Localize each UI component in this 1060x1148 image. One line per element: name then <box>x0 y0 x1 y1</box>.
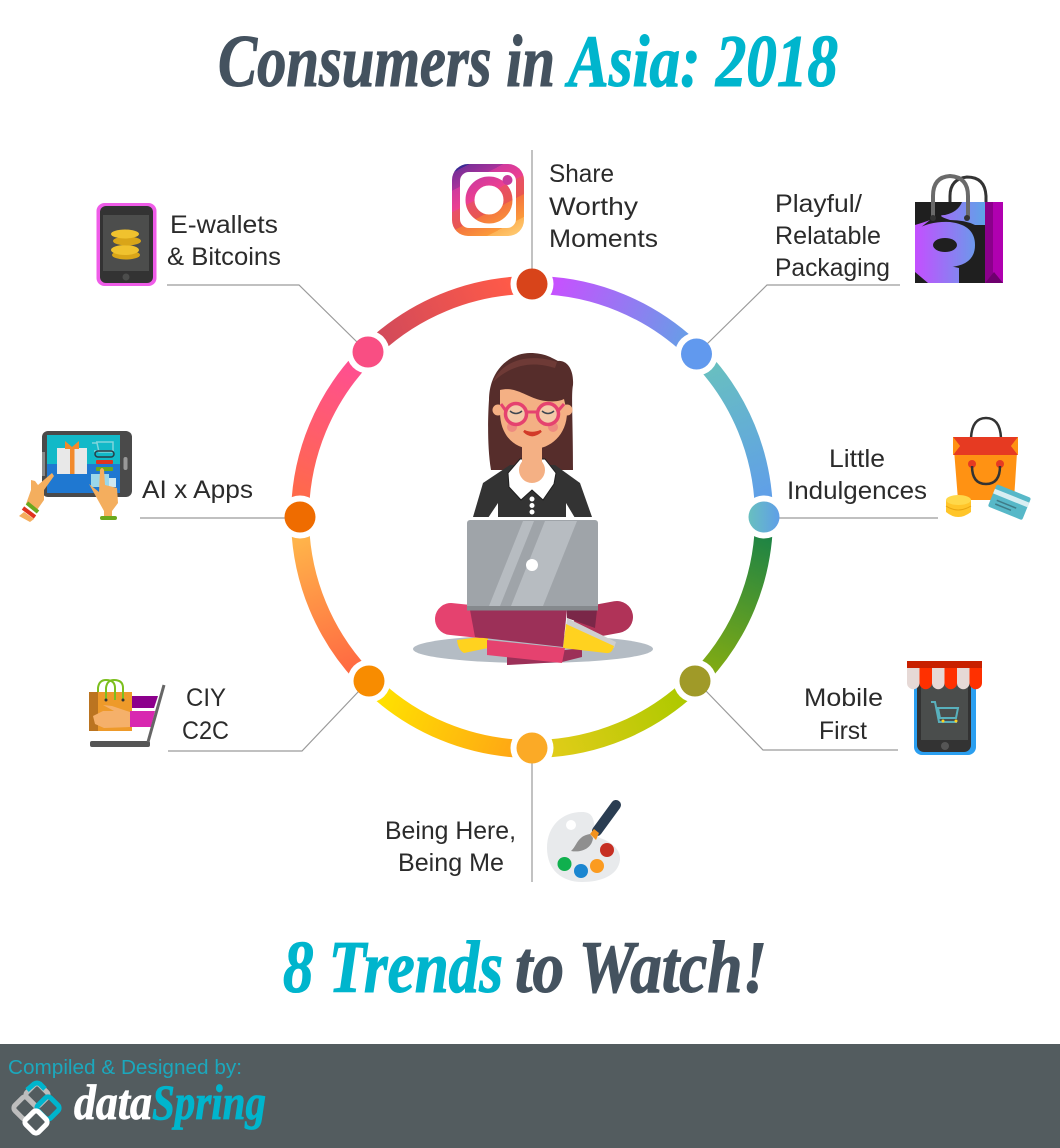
logo wordmark: data <box>74 1074 152 1130</box>
icon: shopping bag with letter e <box>915 176 1003 283</box>
label: Share Worthy Moments: Share <box>549 160 614 188</box>
title: Asia: 2018 <box>565 21 838 103</box>
icon: hands holding tablet <box>19 431 132 522</box>
ring nodes <box>284 268 780 764</box>
label: Playful / Relatable Packaging: Playful/ <box>775 190 862 218</box>
trend: Share Worthy Moments <box>452 160 658 253</box>
trend: E-wallets & Bitcoins <box>96 203 281 286</box>
trend: Being Here, Being Me <box>385 805 620 882</box>
title <box>218 21 838 103</box>
icon: dataSpring logo mark <box>12 1082 61 1135</box>
label: E-wallets & Bitcoins <box>167 211 281 271</box>
label: CIY C2C: C2C <box>182 717 229 745</box>
trend: Playful/Relatable Packaging <box>775 176 1003 283</box>
icon: hand passing bag through laptop <box>89 680 164 747</box>
footer credit text: Compiled & Designed by: <box>8 1056 242 1079</box>
label: Mobile First: Mobile <box>804 684 883 712</box>
title: Consumers in <box>218 21 555 103</box>
label: Little Indulgences <box>787 445 927 505</box>
connector lines <box>140 150 938 882</box>
icon: instagram logo <box>452 164 524 236</box>
label: Playful / Relatable Packaging: Packaging <box>775 254 890 282</box>
label: AI x Apps: AI x Apps <box>142 476 253 504</box>
label: Share Worthy Moments: Moments <box>549 225 658 253</box>
label: Playful / Relatable Packaging: Relatable <box>775 222 881 250</box>
footer band <box>0 1044 1060 1148</box>
logo wordmark <box>74 1074 266 1130</box>
label: Share Worthy Moments <box>549 160 658 253</box>
icon: orange bag with coins and card <box>946 418 1031 520</box>
label: CIY C2C: CIY <box>186 684 226 712</box>
label: E-wallets & Bitcoins: E-wallets <box>170 211 278 239</box>
label: Mobile First: First <box>819 717 867 745</box>
trend: Little Indulgences <box>787 418 1031 520</box>
white halos behind nodes <box>278 262 786 770</box>
trend: CIY C2C <box>89 680 229 747</box>
trend: AI x Apps <box>19 431 253 522</box>
label: Being Here, Being Me <box>385 817 516 877</box>
label: Playful / Relatable Packaging <box>775 190 890 282</box>
label: Little Indulgences: Little <box>829 445 885 473</box>
label: Being Here, Being Me: Being Me <box>398 849 504 877</box>
label: CIY C2C <box>182 684 229 745</box>
logo wordmark: Spring <box>152 1074 266 1130</box>
label: Being Here, Being Me: Being Here, <box>385 817 516 845</box>
label: Little Indulgences: Indulgences <box>787 477 927 505</box>
icon: phone storefront <box>907 661 982 755</box>
label: Share Worthy Moments: Worthy <box>549 193 639 221</box>
trend: Mobile First <box>804 661 982 755</box>
subtitle: to Watch! <box>515 927 767 1009</box>
central illustration: woman with laptop <box>413 353 653 665</box>
ring of gradient arcs <box>256 241 808 793</box>
label: Mobile First <box>804 684 883 745</box>
icon: paint palette <box>547 805 620 882</box>
label: E-wallets & Bitcoins: & Bitcoins <box>167 243 281 271</box>
subtitle: 8 Trends <box>283 927 503 1009</box>
icon: phone with coins <box>96 203 156 286</box>
subtitle <box>283 927 767 1009</box>
